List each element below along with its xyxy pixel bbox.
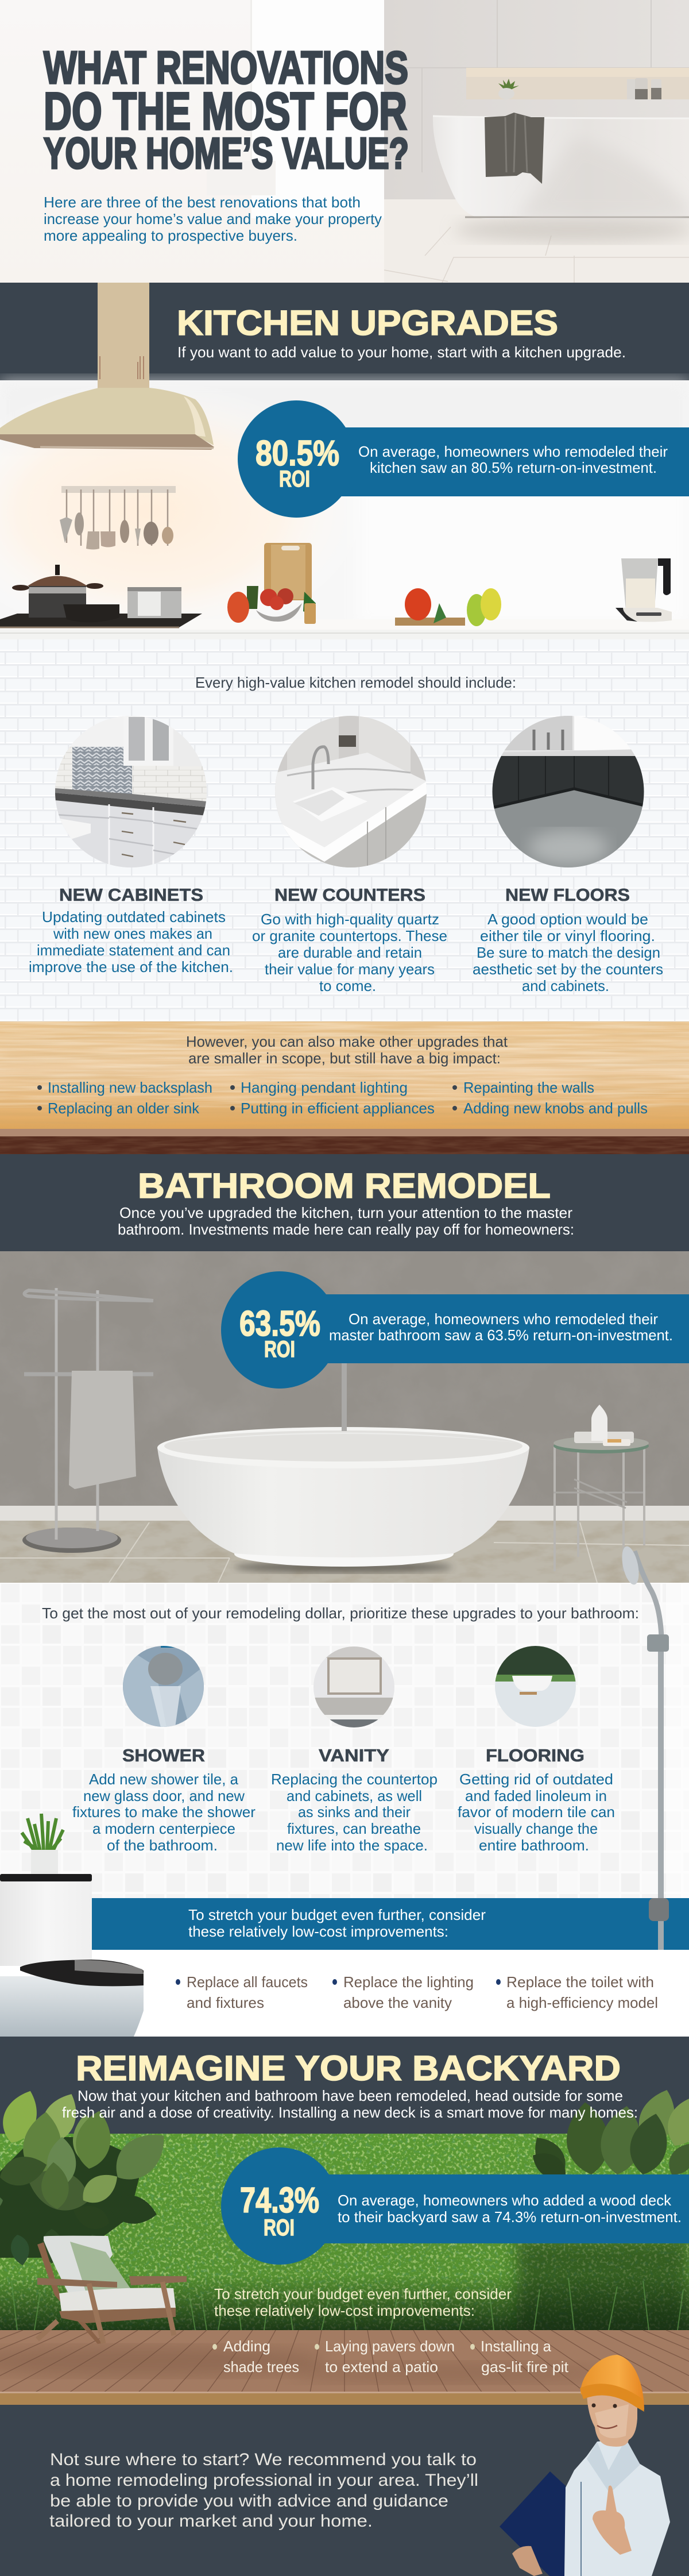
text: shower: of the bathroom.: [107, 1837, 218, 1854]
kitchen header band: [0, 283, 689, 380]
photo circle: flooring: [495, 1646, 576, 1727]
backyard header band: [0, 2037, 689, 2134]
ROI description: [329, 1310, 673, 1344]
text: shower: a modern centerpiece: [92, 1820, 235, 1837]
include heading: Every high-value kitchen remodel should include:: [195, 674, 516, 691]
budget text: To stretch your budget even further, consider: [188, 1906, 486, 1923]
ROI band and circle: [221, 2147, 689, 2265]
hand on clipboard: [512, 2546, 543, 2576]
text: new counters: or granite countertops. These: [252, 927, 447, 944]
text: new floors: aesthetic set by the counters: [473, 961, 663, 978]
column: new counters: [252, 716, 447, 994]
intro text: increase your home’s value and make your property: [44, 210, 382, 227]
title: [44, 42, 409, 178]
bullet text: above the vanity: [343, 1994, 452, 2011]
bullet markers: [176, 1979, 501, 1985]
wall niche with plant and bottles: [466, 68, 689, 99]
towel: [69, 1371, 136, 1489]
low-cost improvements panel: [92, 1950, 689, 2037]
text: vanity: Replacing the countertop: [271, 1771, 438, 1788]
backyard budget text: [214, 2285, 512, 2319]
deck bullet list: Laying pavers down: [325, 2338, 455, 2355]
text: vanity: as sinks and their: [298, 1803, 411, 1821]
shirt: [564, 2439, 670, 2576]
heading: vanity: VANITY: [319, 1745, 389, 1765]
text: flooring: entire bathroom.: [479, 1837, 589, 1854]
bullet text: a high-efficiency model: [506, 1994, 658, 2011]
ROI description: On average, homeowners who added a wood deck: [338, 2192, 672, 2209]
green wall: [0, 2134, 689, 2330]
bathroom photo panel: [0, 1251, 689, 1583]
freestanding bathtub: [157, 1427, 529, 1573]
heading: flooring: FLOORING: [486, 1745, 585, 1765]
ROI description: kitchen saw an 80.5% return-on-investment.: [370, 459, 657, 476]
title: DO THE MOST FOR: [44, 82, 407, 141]
text: new cabinets: immediate statement and can: [37, 942, 230, 959]
title: YOUR HOME’S VALUE?: [44, 129, 409, 178]
bullet list: Putting in efficient appliances: [241, 1100, 435, 1117]
bullet list: Hanging pendant lighting: [241, 1079, 408, 1096]
photo circle: floors: [492, 716, 644, 867]
budget text: [188, 1906, 486, 1940]
ROI label: ROI: [264, 2215, 295, 2240]
ROI description: to their backyard saw a 74.3% return-on-investment.: [338, 2208, 682, 2226]
deck bullet list: gas-lit fire pit: [481, 2358, 569, 2376]
smaller upgrades intro: are smaller in scope, but still have a big impact:: [188, 1050, 501, 1067]
footer text: tailored to your market and your home.: [49, 2512, 373, 2531]
deck bullet list: shade trees: [223, 2358, 299, 2376]
heading: new counters: NEW COUNTERS: [274, 885, 425, 905]
ROI band and circle: [238, 400, 689, 518]
backyard ROI callout: [221, 2147, 689, 2265]
deck bullet list: Installing a: [481, 2338, 552, 2355]
bathroom heading: BATHROOM REMODEL: [138, 1166, 551, 1205]
tiled bathroom panel: [0, 1583, 689, 1899]
footer text: Not sure where to start? We recommend you talk to: [50, 2450, 477, 2469]
cutting board with vegetables and bowl: [227, 543, 501, 626]
title: WHAT RENOVATIONS: [44, 42, 408, 93]
bullet text: Replace all faucets: [187, 1973, 308, 1991]
text: new counters: their value for many years: [265, 961, 435, 978]
range hood: [0, 283, 214, 450]
column: vanity: [271, 1646, 438, 1854]
text: flooring: and faded linoleum in: [465, 1787, 607, 1804]
kitchen ROI callout: [238, 400, 689, 518]
ROI figure: 63.5%: [239, 1304, 320, 1344]
text: new floors: either tile or vinyl flooring.: [480, 927, 655, 944]
text: vanity: [271, 1771, 438, 1854]
text: vanity: new life into the space.: [276, 1837, 428, 1854]
deck: [0, 2330, 689, 2405]
footer panel: [0, 2405, 689, 2576]
smaller upgrades intro: However, you can also make other upgrades that: [186, 1033, 508, 1050]
text: shower: Add new shower tile, a: [89, 1771, 239, 1788]
ROI figure: 74.3%: [240, 2181, 319, 2220]
bullet text: Replace the lighting: [343, 1973, 474, 1991]
footer text: [49, 2450, 478, 2531]
text: vanity: fixtures, can breathe: [287, 1820, 421, 1837]
potted plant: [22, 1814, 63, 1876]
bullet list: Repainting the walls: [463, 1079, 594, 1096]
column: new cabinets: [29, 716, 233, 975]
column: new floors: [473, 716, 663, 994]
text: flooring: favor of modern tile can: [458, 1803, 615, 1821]
intro text: [44, 194, 382, 244]
backyard intro: [62, 2087, 638, 2121]
right foliage: [526, 2085, 689, 2184]
text: flooring: [458, 1771, 615, 1854]
bathroom intro: bathroom. Investments made here can really pay off for homeowners:: [118, 1221, 574, 1238]
ROI description: [358, 443, 668, 476]
heading: new cabinets: NEW CABINETS: [59, 885, 203, 905]
bathroom intro: Once you’ve upgraded the kitchen, turn your attention to the master: [119, 1204, 572, 1221]
intro text: Here are three of the best renovations that both: [44, 194, 361, 211]
ROI band and circle: [221, 1271, 689, 1389]
text: new floors: Be sure to match the design: [477, 944, 660, 961]
text: new counters: are durable and retain: [278, 944, 422, 961]
backyard intro: fresh air and a dose of creativity. Installing a new deck is a smart move for many homes:: [62, 2104, 638, 2121]
deck bullet list: [212, 2338, 569, 2376]
prioritize heading: To get the most out of your remodeling dollar, prioritize these upgrades to your bathroom:: [42, 1605, 639, 1622]
heading: shower: SHOWER: [122, 1745, 205, 1765]
lounge chair: [37, 2236, 187, 2344]
contractor with hard hat and clipboard: [500, 2355, 670, 2576]
budget band: [92, 1898, 689, 1950]
countertop: [0, 619, 689, 639]
kitchen intro line: If you want to add value to your home, start with a kitchen upgrade.: [177, 344, 626, 361]
text: vanity: and cabinets, as well: [287, 1787, 422, 1804]
smaller upgrades intro: [186, 1033, 508, 1067]
deck bullet list: Adding: [223, 2338, 270, 2355]
text: flooring: visually change the: [474, 1820, 598, 1837]
subway tile panel: [0, 639, 689, 1021]
text: shower: fixtures to make the shower: [72, 1803, 256, 1821]
text: new cabinets: improve the use of the kitchen.: [29, 958, 233, 975]
text: new cabinets: Updating outdated cabinets: [42, 908, 226, 925]
photo circle: vanity: [313, 1646, 395, 1728]
shower pole and head: [619, 1545, 669, 1950]
clipboard: [500, 2471, 566, 2576]
text: new counters: to come.: [319, 977, 376, 994]
bullet list: Installing new backsplash: [48, 1079, 212, 1096]
text: flooring: Getting rid of outdated: [459, 1771, 613, 1788]
bathroom header band: [0, 1154, 689, 1251]
ROI description: [338, 2192, 682, 2226]
backyard intro: Now that your kitchen and bathroom have been remodeled, head outside for some: [78, 2087, 623, 2104]
toilet: [0, 1874, 144, 2038]
ROI label: ROI: [264, 1337, 295, 1362]
towel stand: [22, 1288, 153, 1553]
text: new floors: and cabinets.: [522, 977, 609, 994]
hanging utensils: [60, 486, 176, 549]
text: shower: new glass door, and new: [83, 1787, 245, 1804]
photo circle: cabinets: [55, 716, 208, 867]
intro text: more appealing to prospective buyers.: [44, 227, 297, 244]
backyard scene: [0, 2085, 689, 2405]
text: new floors: A good option would be: [487, 911, 648, 928]
bullet list: [37, 1079, 648, 1117]
kitchen photo panel: [0, 283, 689, 643]
heading: new floors: NEW FLOORS: [505, 885, 630, 905]
column: flooring: [458, 1646, 615, 1854]
text: new floors: [473, 911, 663, 994]
hero background: faded bathroom: [0, 0, 689, 283]
electric kettle: [616, 558, 672, 622]
ROI description: On average, homeowners who remodeled their: [358, 443, 668, 460]
budget text: these relatively low-cost improvements:: [188, 1923, 448, 1940]
ROI description: On average, homeowners who remodeled their: [349, 1310, 658, 1328]
bullet text: and fixtures: [187, 1994, 264, 2011]
ROI description: master bathroom saw a 63.5% return-on-investment.: [329, 1326, 673, 1344]
photo circle: shower: [123, 1646, 204, 1727]
ROI label: ROI: [279, 466, 310, 492]
text: new cabinets: with new ones makes an: [53, 925, 212, 942]
side table with toiletries: [553, 1405, 649, 1571]
left foliage: [0, 2085, 176, 2267]
floor faucet: [342, 1363, 347, 1431]
ROI figure: 80.5%: [256, 434, 339, 473]
tall grass: [11, 2278, 683, 2330]
photo circle: counters: [275, 716, 427, 867]
head: [587, 2390, 637, 2447]
bullet text: [187, 1973, 658, 2011]
hero panel: [0, 0, 689, 283]
footer text: be able to provide you with advice and guidance: [50, 2492, 448, 2511]
column: shower: [72, 1646, 256, 1854]
backyard budget text: these relatively low-cost improvements:: [214, 2302, 475, 2319]
text: new counters: [252, 911, 447, 994]
footer text: a home remodeling professional in your area. They’ll: [50, 2471, 478, 2490]
cooking pots on stove: [0, 565, 202, 627]
hard hat: [580, 2355, 644, 2410]
text: new counters: Go with high-quality quartz: [261, 911, 439, 928]
wood countertop panel: [0, 1021, 689, 1154]
text: new cabinets: [29, 908, 233, 975]
bullet text: Replace the toilet with: [506, 1973, 654, 1991]
backyard budget text: To stretch your budget even further, consider: [214, 2285, 512, 2303]
kitchen heading: KITCHEN UPGRADES: [177, 303, 558, 342]
bullet list: Replacing an older sink: [48, 1100, 200, 1117]
thumbs-up hand: [593, 2485, 632, 2555]
backyard heading: REIMAGINE YOUR BACKYARD: [76, 2049, 621, 2088]
bathroom intro: [118, 1204, 574, 1238]
text: shower: [72, 1771, 256, 1854]
deck bullet list: to extend a patio: [325, 2358, 438, 2376]
bullet list: Adding new knobs and pulls: [463, 1100, 648, 1117]
bathtub with towel: [433, 113, 689, 242]
bathroom ROI callout: [221, 1271, 689, 1389]
